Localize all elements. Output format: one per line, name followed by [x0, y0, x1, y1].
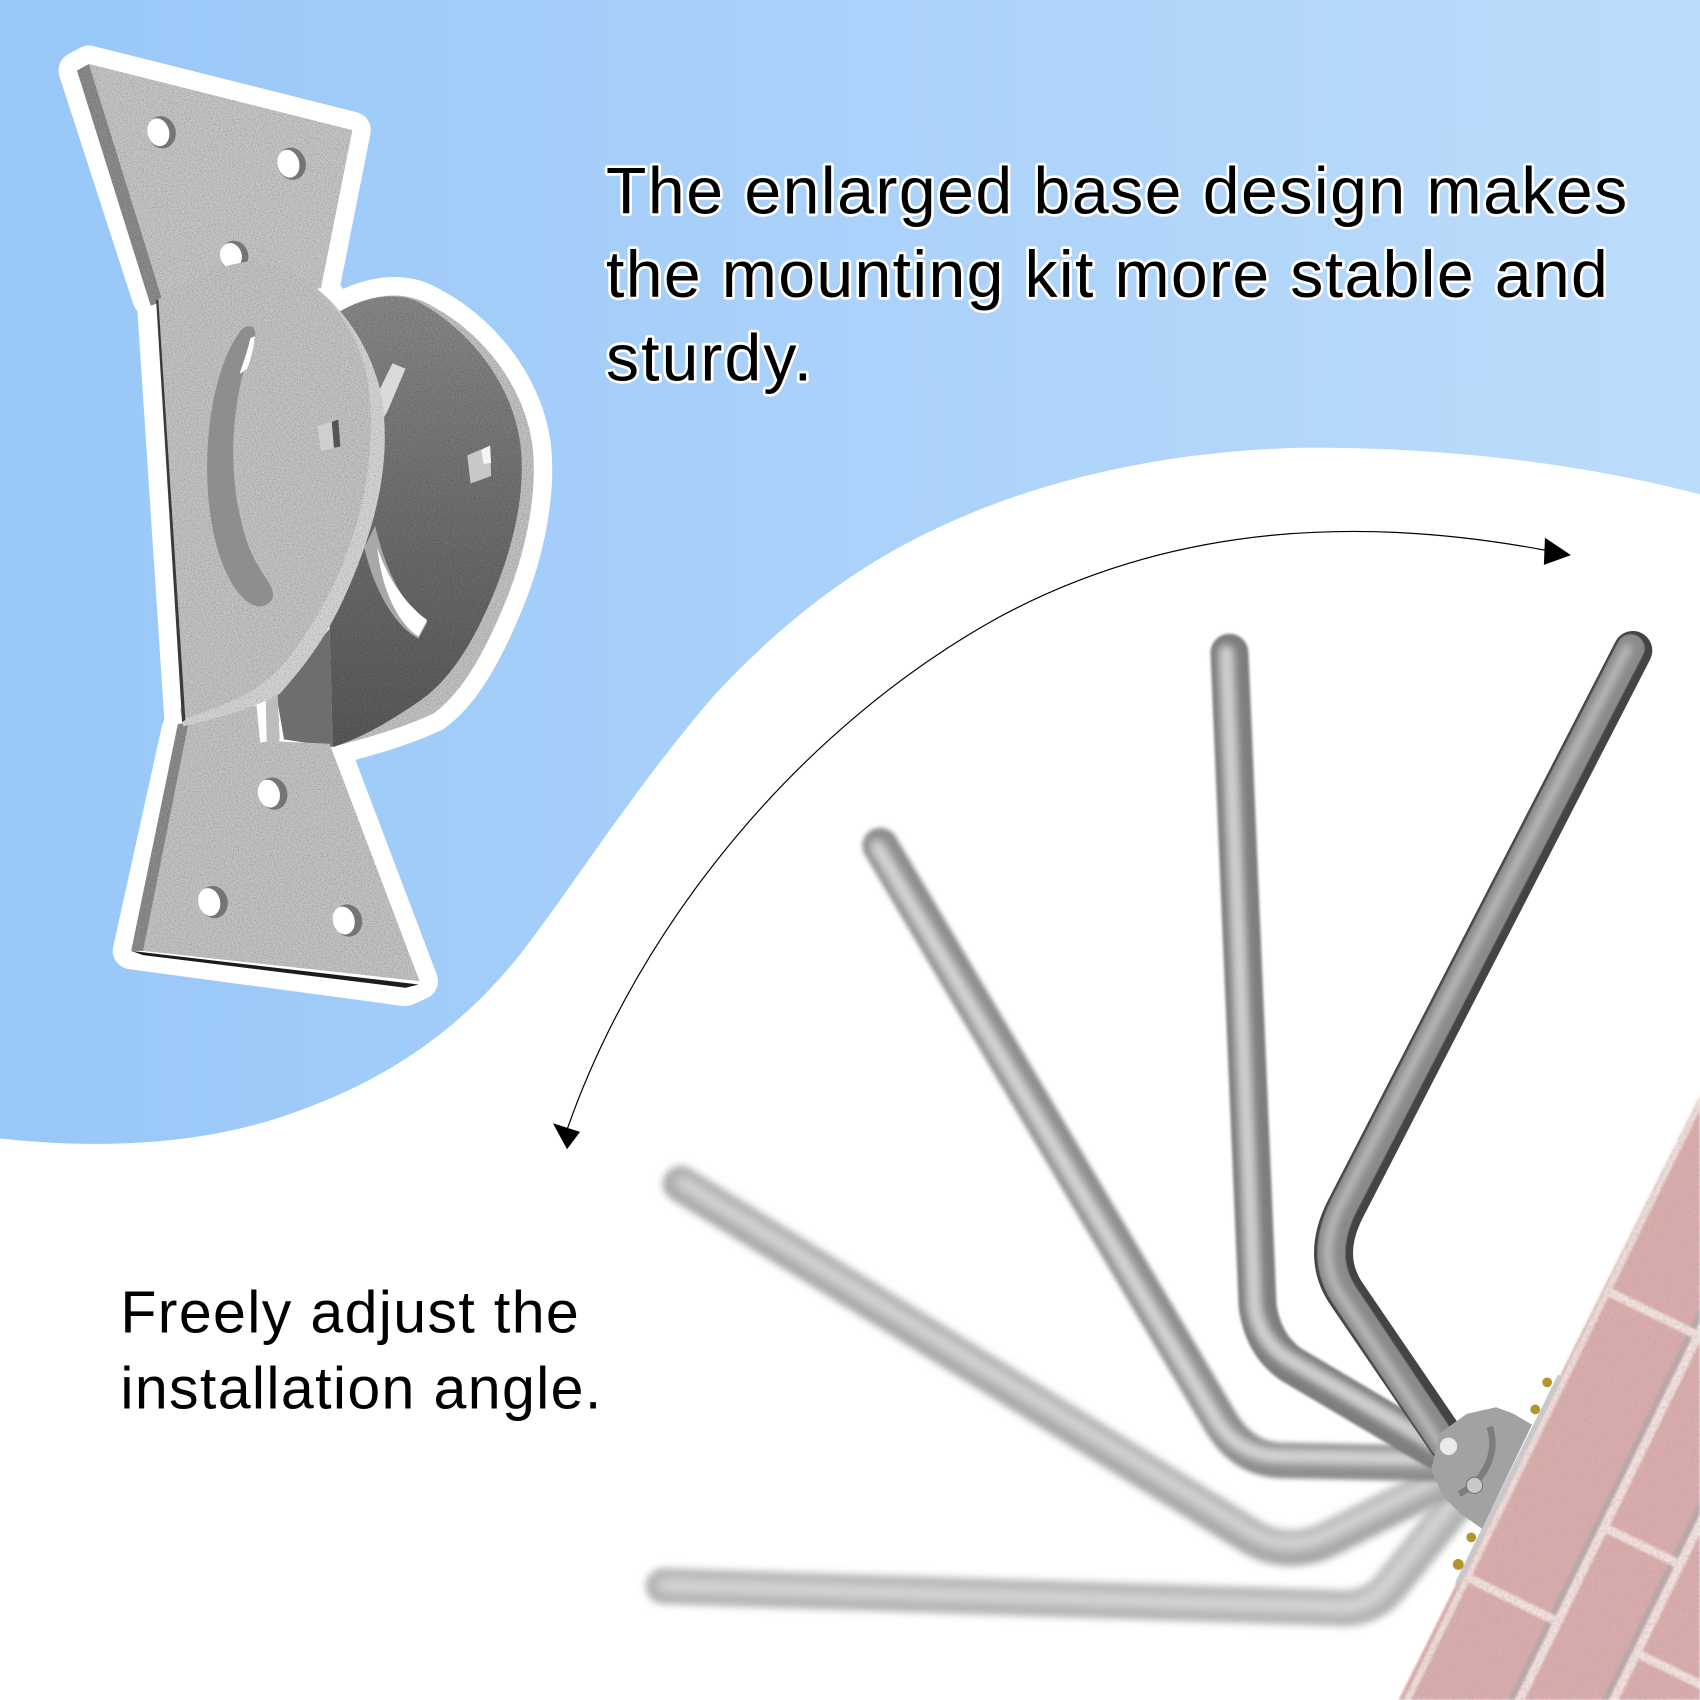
- adjustable rod position 5: [664, 1502, 1458, 1608]
- adjustable rod position 4: [681, 1182, 1447, 1548]
- installed bracket on wall: [1431, 1375, 1562, 1585]
- caption text: free angle: Freely adjust the: [120, 1279, 580, 1345]
- bottom mounting plate: [131, 705, 420, 988]
- brick wall: [1399, 1095, 1700, 1700]
- heading text: enlarged base: [606, 155, 1629, 396]
- rear square tab: [467, 446, 491, 484]
- white wave panel: [0, 448, 1700, 1700]
- nut: [1466, 1477, 1483, 1493]
- screw tips: [1453, 1377, 1552, 1570]
- lower stub: [256, 693, 280, 743]
- back plate strip: [1455, 1375, 1562, 1585]
- caption text: free angle: installation angle.: [120, 1355, 603, 1421]
- rotation arc with arrowheads: [553, 531, 1571, 1149]
- front tear-shaped disc: [156, 260, 385, 726]
- rear upper slot: [374, 363, 405, 425]
- pivot hole: [1440, 1438, 1457, 1455]
- rear lower slot: [364, 526, 427, 639]
- heading text: enlarged base: the mounting kit more stable and: [606, 238, 1609, 312]
- bracket face: [1431, 1407, 1532, 1529]
- adjustable rod position 3: [877, 846, 1437, 1464]
- adjustable rod position 2: [1226, 653, 1437, 1451]
- arrowhead upper right: [1544, 538, 1571, 565]
- enlarged view of the bracket: [77, 64, 534, 988]
- rear plate: [275, 295, 534, 747]
- heading text: enlarged base: The enlarged base design makes: [606, 155, 1629, 229]
- top mounting plate: [77, 64, 352, 306]
- slot: [1459, 1427, 1492, 1494]
- arrowhead lower left: [553, 1123, 580, 1149]
- heading text: enlarged base: sturdy.: [606, 322, 814, 396]
- adjustable rod position 1 foreground: [1328, 648, 1633, 1445]
- caption text: free angle: [120, 1279, 603, 1421]
- white sticker outline: [77, 64, 534, 988]
